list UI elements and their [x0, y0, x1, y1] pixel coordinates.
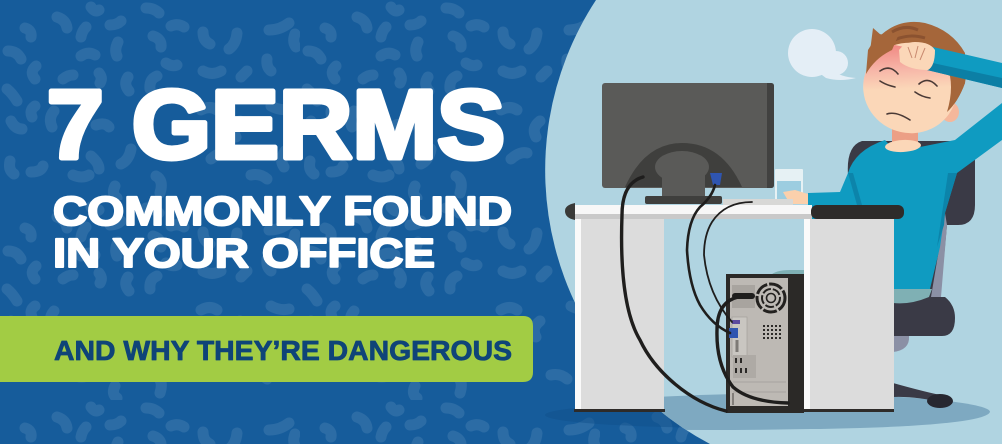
floor shadow on blue — [545, 402, 935, 428]
hair fringe — [866, 34, 966, 112]
floor shadow — [662, 394, 990, 430]
office chair — [848, 141, 975, 408]
keyboard — [723, 199, 793, 205]
fist — [899, 42, 935, 70]
desk — [565, 203, 904, 412]
water glass — [775, 169, 808, 204]
banner text: AND WHY THEY’RE DANGEROUS — [54, 335, 512, 366]
vent — [763, 326, 782, 338]
forearm — [927, 47, 1002, 88]
forehead flush — [864, 45, 950, 100]
subheading: COMMONLY FOUND — [53, 188, 512, 234]
desk top — [575, 205, 812, 219]
ports — [732, 317, 747, 357]
hair back — [867, 22, 965, 112]
thought bubble — [788, 29, 856, 80]
left leg — [575, 219, 664, 409]
light blue circle backdrop — [545, 0, 1002, 444]
person — [770, 22, 1002, 303]
monitor — [602, 83, 774, 204]
ear — [941, 102, 959, 122]
heading: 7 germs: 7 GERMS — [47, 70, 505, 179]
subheading — [53, 188, 512, 276]
face — [851, 31, 969, 145]
cables — [622, 177, 788, 411]
eyes, brows and mouth — [880, 68, 937, 120]
right leg — [804, 219, 894, 409]
green banner — [0, 316, 533, 382]
pants behind tower — [770, 270, 805, 280]
subheading: IN YOUR OFFICE — [53, 230, 435, 276]
computer tower — [726, 274, 804, 413]
shirt and arm — [805, 103, 1002, 289]
neck and collar — [892, 128, 918, 148]
fan — [757, 284, 785, 312]
